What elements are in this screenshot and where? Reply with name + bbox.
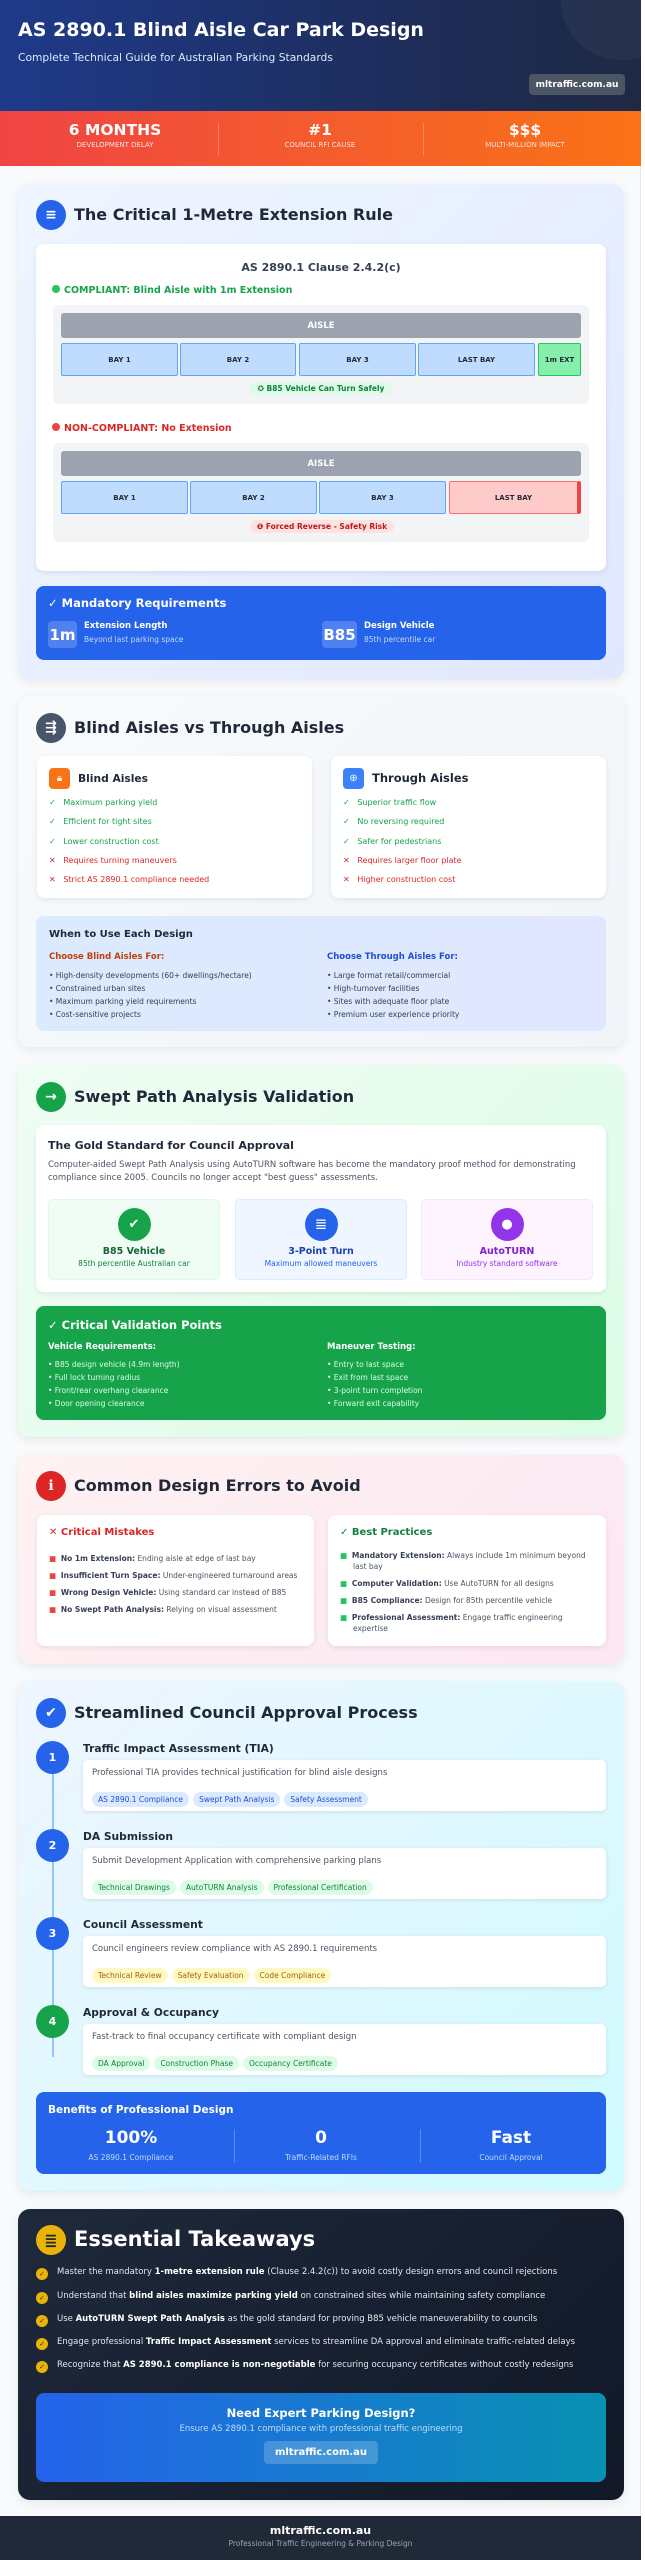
heading: Common Design Errors to Avoid: [74, 1476, 361, 1495]
compliant diagram: BAY 1: [108, 356, 131, 364]
card: critical mistakes: ✕ Critical Mistakes: [49, 1527, 154, 1538]
feature: AutoTURN: AutoTURN: [480, 1246, 534, 1257]
header: [0, 0, 641, 111]
compliant diagram: ✪ B85 Vehicle Can Turn Safely: [258, 384, 384, 393]
when to use box: • Sites with adequate floor plate: [327, 997, 449, 1006]
card: blind aisles: Blind Aisles: [78, 772, 148, 785]
icon: arrows: ⇶: [45, 720, 57, 736]
feature: AutoTURN: [421, 1199, 593, 1280]
when to use box: Choose Blind Aisles For:: [49, 952, 164, 962]
mandatory requirements box: 1m: [49, 626, 76, 644]
when to use box: [36, 916, 606, 1031]
step 2: [36, 1829, 607, 1901]
card: blind aisles: ✓ Maximum parking yield: [49, 798, 157, 807]
non-compliant diagram: ❶ Forced Reverse - Safety Risk: [257, 522, 387, 531]
stat: $$$: $$$: [509, 121, 541, 139]
benefits box: Traffic-Related RFIs: [285, 2153, 357, 2162]
when to use box: When to Use Each Design: [49, 929, 193, 940]
icon: menu: [36, 200, 66, 230]
icon: arrow: →: [45, 1089, 57, 1105]
card: critical mistakes: ■ No 1m Extension: Ending aisle at edge of last bay: [49, 1554, 256, 1563]
critical validation box: • Front/rear overhang clearance: [48, 1386, 168, 1395]
benefits box: Benefits of Professional Design: [48, 2104, 233, 2116]
stat: 6 months: 6 MONTHS: [69, 121, 161, 139]
step 3: Code Compliance: [260, 1971, 325, 1980]
benefits box: AS 2890.1 Compliance: [88, 2153, 174, 2162]
footer: [0, 2516, 641, 2560]
step 4: [36, 2005, 607, 2077]
critical validation box: • B85 design vehicle (4.9m length): [48, 1360, 180, 1369]
gold standard card: Computer-aided Swept Path Analysis using AutoTURN software has become the mandatory proof method for demonstrating compliance since 2005. Councils no longer accept "best guess" assessments.: [48, 1160, 576, 1183]
card: best practices: ■ Computer Validation: Use AutoTURN for all designs: [340, 1579, 554, 1588]
card: best practices: ■ B85 Compliance: Design for 85th percentile vehicle: [340, 1596, 552, 1605]
heading: Streamlined Council Approval Process: [74, 1703, 418, 1722]
step 3: Technical Review: [98, 1971, 162, 1980]
when to use box: • Large format retail/commercial: [327, 971, 450, 980]
stat: #1: COUNCIL RFI CAUSE: [285, 141, 355, 149]
non-compliant diagram: AISLE: [307, 458, 335, 468]
when to use box: • Premium user experience priority: [327, 1010, 459, 1019]
benefits box: Council Approval: [479, 2153, 543, 2162]
button: site: mltraffic.com.au: [536, 80, 618, 90]
heading: The Critical 1-Metre Extension Rule: [74, 205, 393, 224]
CTA box: [36, 2393, 606, 2482]
stat: 6 months: DEVELOPMENT DELAY: [76, 141, 154, 149]
non-compliant diagram: [53, 443, 589, 542]
compliant diagram: BAY 3: [346, 356, 369, 364]
mandatory requirements box: B85: [323, 626, 356, 644]
mandatory requirements box: Beyond last parking space: [84, 635, 183, 644]
when to use box: Choose Through Aisles For:: [327, 952, 458, 962]
non-compliant diagram: LAST BAY: [495, 494, 532, 502]
takeaway list: ✓: [39, 2294, 45, 2302]
step 3: Council engineers review compliance with AS 2890.1 requirements: [92, 1944, 377, 1954]
takeaway list: Engage professional Traffic Impact Assessment services to streamline DA approval and eliminate traffic-related delays: [57, 2337, 575, 2347]
card: critical mistakes: ■ No Swept Path Analysis: Relying on visual assessment: [49, 1605, 277, 1614]
card: through aisles: ✓ No reversing required: [343, 817, 444, 826]
non-compliant diagram: BAY 2: [242, 494, 265, 502]
step 1: Safety Assessment: [290, 1795, 362, 1804]
step 4: 4: [49, 2015, 56, 2028]
stat: $$$: MULTI-MILLION IMPACT: [485, 141, 565, 149]
footer: Professional Traffic Engineering & Parking Design: [228, 2539, 413, 2548]
feature: B85: B85 Vehicle: [103, 1246, 165, 1257]
feature: B85: [48, 1199, 220, 1280]
step 1: Professional TIA provides technical justification for blind aisle designs: [92, 1768, 387, 1778]
card: blind aisles: 🔒︎: [57, 773, 62, 784]
takeaway list: ✓: [39, 2317, 45, 2325]
stat: #1: [285, 121, 355, 149]
feature: AutoTURN: Industry standard software: [456, 1259, 558, 1268]
benefits box: Fast: [491, 2128, 531, 2148]
mandatory requirements box: ✓ Mandatory Requirements: [48, 596, 226, 610]
panel: essential takeaways: [18, 2209, 624, 2500]
card: critical mistakes: [37, 1515, 314, 1646]
icon: list: [36, 2225, 66, 2255]
button: site: [529, 74, 625, 95]
compliant diagram: [53, 305, 589, 404]
benefits box: 0: [315, 2128, 327, 2148]
footer: mltraffic.com.au: [270, 2524, 371, 2537]
step 2: Professional Certification: [274, 1883, 367, 1892]
takeaway list: Recognize that AS 2890.1 compliance is non-negotiable for securing occupancy certificates without costly redesigns: [57, 2360, 573, 2370]
takeaway list: Understand that blind aisles maximize parking yield on constrained sites while maintaining safety compliance: [57, 2291, 545, 2301]
stat: 6 months: [69, 121, 161, 149]
icon: list: ≣: [44, 2230, 58, 2250]
stat: #1: #1: [308, 121, 332, 139]
when to use box: • High-turnover facilities: [327, 984, 419, 993]
CTA box: mltraffic.com.au: [275, 2447, 367, 2458]
critical validation box: [36, 1306, 606, 1420]
card: best practices: ■ Mandatory Extension: Always include 1m minimum beyond last bay: [340, 1551, 586, 1571]
panel: 1-metre extension rule: [18, 184, 624, 679]
feature: B85: ✔: [129, 1217, 139, 1232]
critical validation box: • Entry to last space: [327, 1360, 404, 1369]
card: through aisles: Through Aisles: [372, 771, 468, 785]
step 2: 2: [49, 1839, 56, 1852]
critical validation box: • 3-point turn completion: [327, 1386, 422, 1395]
feature: 3-point turn: [235, 1199, 407, 1280]
card: best practices: ■ Professional Assessment: Engage traffic engineering expertise: [340, 1613, 563, 1633]
when to use box: • Maximum parking yield requirements: [49, 997, 196, 1006]
step 2: DA Submission: [83, 1830, 173, 1843]
step 2: Submit Development Application with comprehensive parking plans: [92, 1856, 381, 1866]
non-compliant label: NON-COMPLIANT: No Extension: [64, 423, 232, 434]
card: blind aisles: [37, 756, 312, 898]
mandatory requirements box: Extension Length: [84, 621, 167, 631]
icon: arrow: [36, 1082, 66, 1112]
step 3: [36, 1917, 607, 1989]
feature: 3-point turn: ≣: [315, 1215, 327, 1233]
when to use box: • High-density developments (60+ dwellings/hectare): [49, 971, 252, 980]
panel: swept path: [18, 1065, 624, 1437]
takeaway list: Use AutoTURN Swept Path Analysis as the gold standard for proving B85 vehicle maneuverability to councils: [57, 2314, 537, 2324]
takeaway list: Master the mandatory 1-metre extension rule (Clause 2.4.2(c)) to avoid costly design errors and council rejections: [57, 2267, 557, 2277]
step 2: AutoTURN Analysis: [186, 1883, 258, 1892]
compliant diagram: 1m EXT: [545, 356, 574, 364]
critical validation box: Vehicle Requirements:: [48, 1342, 156, 1352]
stats bar: [0, 111, 641, 166]
card: blind aisles: ✕ Strict AS 2890.1 compliance needed: [49, 875, 209, 884]
compliant diagram: BAY 2: [227, 356, 249, 364]
benefits box: [36, 2092, 606, 2174]
step 1: Traffic Impact Assessment (TIA): [83, 1742, 274, 1755]
critical validation box: • Forward exit capability: [327, 1399, 419, 1408]
card: through aisles: [331, 756, 606, 898]
mandatory requirements box: [36, 586, 606, 660]
step 2: Technical Drawings: [98, 1883, 170, 1892]
gold standard card: The Gold Standard for Council Approval: [48, 1139, 294, 1152]
when to use box: • Cost-sensitive projects: [49, 1010, 141, 1019]
step 4: Occupancy Certificate: [249, 2059, 332, 2068]
step 3: Safety Evaluation: [178, 1971, 244, 1980]
feature: 3-point turn: Maximum allowed maneuvers: [265, 1259, 377, 1268]
mandatory requirements box: Design Vehicle: [364, 621, 434, 631]
step 3: Council Assessment: [83, 1918, 203, 1931]
panel: approval process: [18, 1681, 624, 2191]
heading: Blind Aisles vs Through Aisles: [74, 718, 344, 737]
subtitle: Complete Technical Guide for Australian Parking Standards: [18, 51, 333, 64]
panel: common errors: [18, 1455, 624, 1664]
feature: 3-point turn: 3-Point Turn: [288, 1246, 354, 1257]
gold standard card: [36, 1125, 606, 1292]
icon: menu: ≡: [45, 207, 57, 223]
takeaway list: ✓: [39, 2340, 45, 2348]
compliant diagram: AISLE: [307, 320, 335, 330]
step 3: 3: [49, 1927, 56, 1940]
step 4: Fast-track to final occupancy certificate with compliant design: [92, 2032, 356, 2042]
step 4: Approval & Occupancy: [83, 2006, 219, 2019]
step 4: Construction Phase: [160, 2059, 233, 2068]
non-compliant diagram: BAY 3: [371, 494, 394, 502]
icon: info: ℹ: [48, 1478, 54, 1494]
card: critical mistakes: ■ Wrong Design Vehicle: Using standard car instead of B85: [49, 1588, 286, 1597]
feature: AutoTURN: ●: [501, 1217, 513, 1232]
card: blind aisles: ✕ Requires turning maneuvers: [49, 856, 177, 865]
icon: info: [36, 1471, 66, 1501]
step 1: 1: [49, 1751, 56, 1764]
diagram card: AS 2890.1 Clause 2.4.2(c): [241, 261, 401, 274]
card: critical mistakes: ■ Insufficient Turn Space: Under-engineered turnaround areas: [49, 1571, 297, 1580]
benefits box: 100%: [105, 2128, 157, 2148]
step 1: Swept Path Analysis: [199, 1795, 274, 1804]
icon: badge: [36, 1698, 66, 1728]
card: through aisles: ✕ Higher construction cost: [343, 875, 455, 884]
card: through aisles: ⊕: [349, 773, 358, 784]
panel: blind vs through: [18, 696, 624, 1047]
critical validation box: Maneuver Testing:: [327, 1342, 416, 1352]
takeaway list: ✓: [39, 2363, 45, 2371]
CTA box: Need Expert Parking Design?: [227, 2406, 415, 2420]
takeaway list: ✓: [39, 2270, 45, 2278]
feature: B85: 85th percentile Australian car: [78, 1259, 190, 1268]
step 1: [36, 1741, 607, 1813]
critical validation box: • Door opening clearance: [48, 1399, 145, 1408]
card: best practices: [328, 1515, 606, 1646]
non-compliant diagram: BAY 1: [113, 494, 136, 502]
compliant diagram: LAST BAY: [458, 356, 495, 364]
compliant label: COMPLIANT: Blind Aisle with 1m Extension: [64, 285, 292, 296]
stat: $$$: [485, 121, 565, 149]
critical validation box: ✓ Critical Validation Points: [48, 1318, 222, 1332]
card: blind aisles: ✓ Efficient for tight sites: [49, 817, 152, 826]
card: blind aisles: ✓ Lower construction cost: [49, 837, 159, 846]
card: best practices: ✓ Best Practices: [340, 1527, 432, 1538]
mandatory requirements box: 85th percentile car: [364, 635, 435, 644]
step 1: AS 2890.1 Compliance: [98, 1795, 183, 1804]
critical validation box: • Exit from last space: [327, 1373, 408, 1382]
heading: Essential Takeaways: [74, 2227, 315, 2251]
diagram card: [36, 244, 606, 571]
card: through aisles: ✓ Superior traffic flow: [343, 798, 436, 807]
heading: Swept Path Analysis Validation: [74, 1087, 354, 1106]
critical validation box: • Full lock turning radius: [48, 1373, 140, 1382]
title: AS 2890.1 Blind Aisle Car Park Design: [18, 19, 424, 41]
icon: arrows: [36, 713, 66, 743]
CTA box: Ensure AS 2890.1 compliance with professional traffic engineering: [179, 2424, 463, 2434]
step 4: DA Approval: [98, 2059, 144, 2068]
takeaway list: [36, 2267, 575, 2373]
card: through aisles: ✕ Requires larger floor plate: [343, 856, 462, 865]
card: through aisles: ✓ Safer for pedestrians: [343, 837, 441, 846]
icon: badge: ✔: [45, 1705, 57, 1721]
when to use box: • Constrained urban sites: [49, 984, 145, 993]
